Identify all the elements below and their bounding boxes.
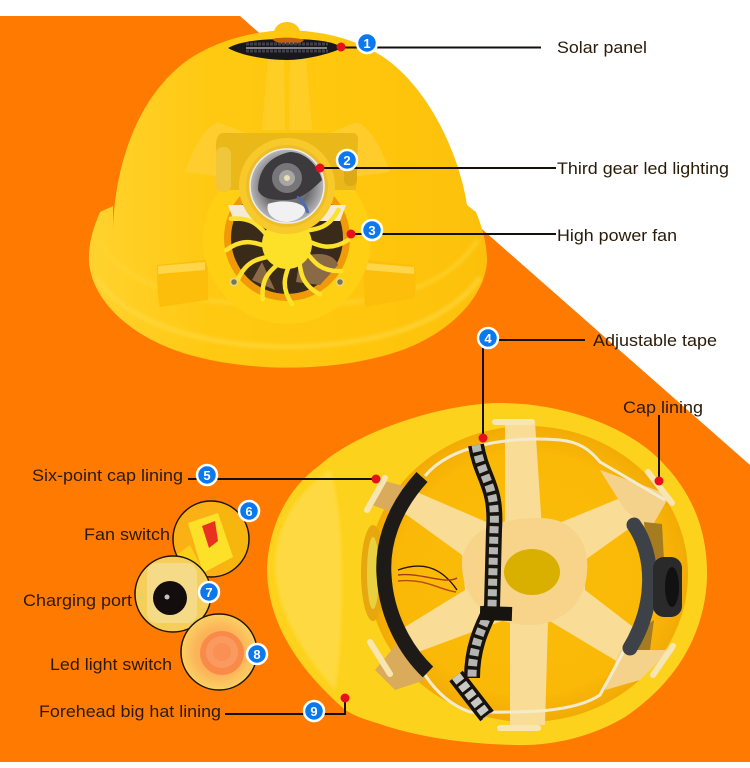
brim step shading (98, 240, 478, 306)
fan hub (262, 219, 312, 269)
suspension straps (372, 422, 670, 725)
front fan seen through shell (361, 525, 385, 621)
centre ribs (262, 54, 312, 130)
numbered badges: 8 (253, 647, 261, 662)
labels: Forehead big hat lining (39, 703, 221, 721)
top helmet: front view (89, 22, 487, 368)
numbered badges: 7 (205, 585, 213, 600)
cavity (368, 426, 688, 722)
red marker dots (316, 42, 664, 702)
labels: Solar panel (557, 39, 647, 57)
numbered badges: 4 (484, 331, 492, 346)
black sweatband (384, 477, 428, 672)
front lip highlight (275, 470, 342, 690)
cap lining clips (367, 422, 673, 728)
numbered badges: 2 (343, 153, 351, 168)
solar panel (228, 38, 342, 60)
labels: Cap lining (623, 399, 703, 417)
callout lines (188, 48, 659, 714)
headlamp (216, 133, 358, 234)
labels: High power fan (557, 227, 677, 245)
numbered badges: 1 (363, 36, 371, 51)
numbered badges (197, 33, 498, 721)
centre ring (462, 518, 587, 625)
wires (398, 566, 457, 592)
bottom helmet: underside view (267, 403, 707, 745)
centre hole (504, 549, 560, 595)
numbered badges: 9 (310, 704, 318, 719)
detail: charging port (135, 556, 211, 632)
numbered badges: 3 (368, 223, 376, 238)
rear adjuster backing (634, 522, 664, 650)
detail: fan switch (170, 500, 250, 580)
labels: Six-point cap lining (32, 467, 183, 485)
numbered badges: 6 (245, 504, 253, 519)
labels: Fan switch (84, 526, 170, 544)
top nub (274, 22, 300, 31)
numbered badges: 5 (203, 468, 211, 483)
adjustable tape (456, 445, 512, 716)
headlamp shoulder plates (185, 122, 390, 178)
lower brim highlight (96, 278, 480, 347)
labels: Charging port (23, 592, 132, 610)
labels: Third gear led lighting (557, 160, 729, 178)
helmet shell with brim (89, 30, 487, 368)
labels: Led light switch (50, 656, 172, 674)
rear adjuster knob (653, 557, 682, 617)
detail: led light switch (181, 614, 257, 690)
rear adjuster band (630, 525, 650, 648)
outer shell (267, 403, 707, 745)
fan housing (203, 156, 371, 324)
suspension ring (425, 439, 665, 712)
side bumps on brim (157, 260, 416, 307)
labels: Adjustable tape (593, 332, 717, 350)
fan blades (226, 210, 348, 304)
fan screws (230, 278, 344, 286)
